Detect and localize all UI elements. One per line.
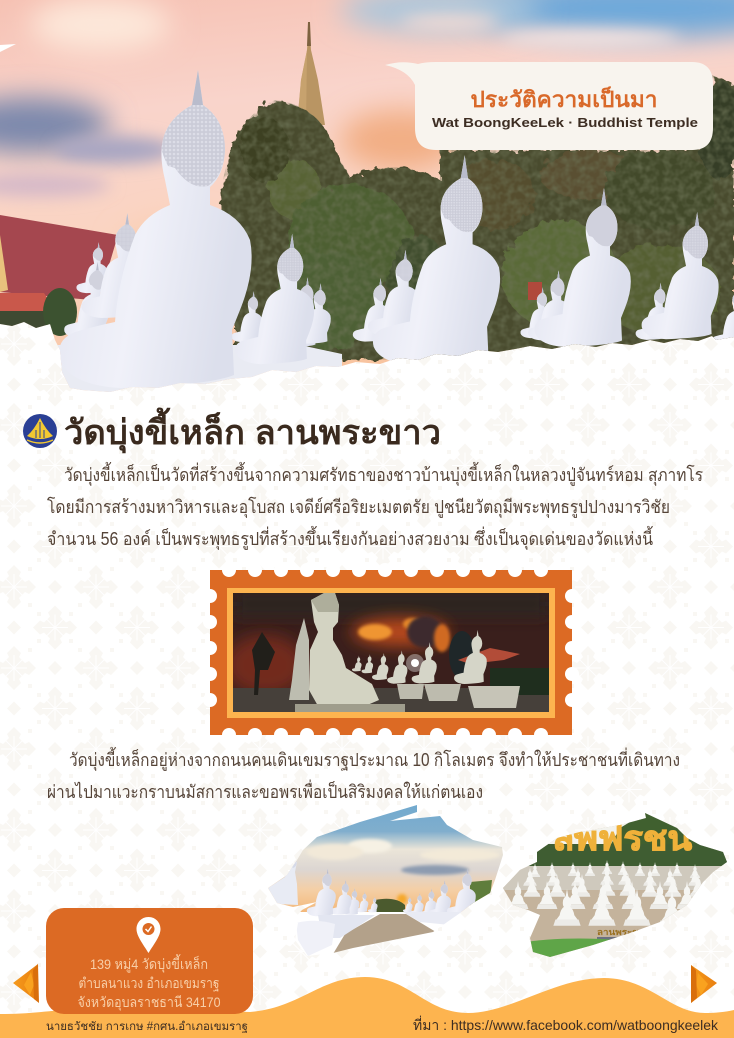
sky clouds: [0, 0, 734, 280]
medium statues: [235, 155, 719, 365]
large statue side view: [309, 593, 379, 706]
bottom orange wave: [0, 977, 734, 1038]
address text: [78, 954, 221, 1011]
paragraph 1: จำนวน 56 องค์ เป็นพระพุทธรูปที่สร้างขึ้นเรียงกันอย่างสวยงาม ซึ่งเป็นจุดเด่นของวัดแห่งนี้: [47, 526, 653, 550]
address text: ตำบลนาแวง อำเภอเขมราฐ: [78, 975, 220, 992]
icon: organisation logo: [23, 414, 57, 448]
footer source: ที่มา : https://www.facebook.com/watboongkeelek: [413, 1016, 719, 1033]
small distant statues: [64, 213, 734, 348]
night photo: [225, 593, 549, 712]
bubble title: ประวัติความเป็นมา: [470, 85, 658, 112]
white shard: [0, 44, 16, 52]
paragraph 2: [47, 747, 680, 802]
main heading: วัดบุ่งขี้เหล็ก ลานพระขาว: [64, 407, 441, 454]
left row of statues: [296, 868, 378, 956]
stamp framed night photo: [203, 563, 579, 742]
temple spire: [297, 22, 325, 125]
brush photo: statues at sunset: [268, 805, 503, 956]
brush photo: rows of statues with sign: [500, 810, 730, 960]
hero photo: white Buddha statues at sunset: [0, 0, 734, 400]
photo sign lettering: ลพฟรชน: [552, 820, 692, 858]
left stack of statues: [289, 618, 309, 700]
temple roof: [0, 215, 118, 336]
footer credit: นายธวัชชัย การเกษ #กศน.อำเภอเขมราฐ: [46, 1020, 248, 1033]
paragraph 1: [47, 462, 703, 550]
statue plinths: [58, 345, 342, 392]
bubble subtitle: Wat BoongKeeLek · Buddhist Temple: [432, 116, 698, 130]
arrow: next: [691, 965, 717, 1003]
arrow: previous: [13, 964, 39, 1003]
left torso: [268, 862, 298, 905]
address text: 139 หมู่4 วัดบุ่งขี้เหล็ก: [90, 954, 208, 973]
address text: จังหวัดอุบลราชธานี 34170: [78, 994, 221, 1011]
rows of small white statues: [508, 860, 706, 927]
ground sign: ลานพระขาว: [597, 927, 650, 937]
right row of statues: [403, 868, 476, 925]
speech bubble heading: [385, 62, 713, 150]
icon: location pin: [136, 917, 160, 953]
address box: [46, 908, 253, 1014]
trees: [215, 70, 734, 365]
large foreground statue: [59, 70, 252, 388]
paragraph 2: ผ่านไปมาแวะกราบนมัสการและขอพรเพื่อเป็นสิริมงคลให้แก่ตนเอง: [47, 779, 483, 802]
